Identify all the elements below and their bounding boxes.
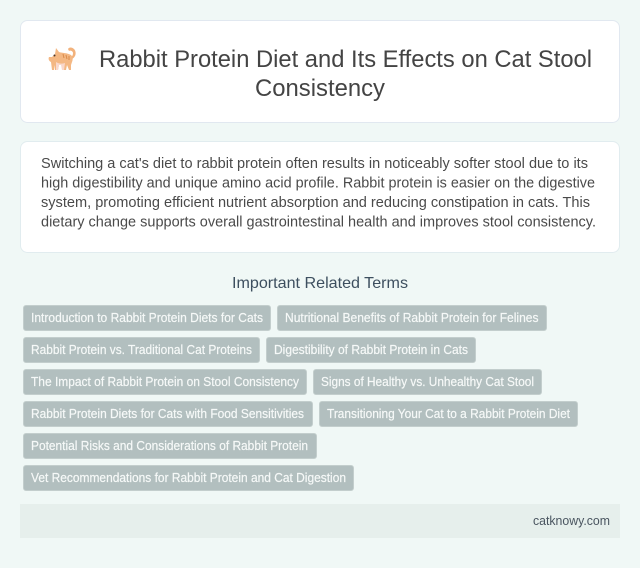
tag: impact: The Impact of Rabbit Protein on Stool Consistency	[31, 374, 300, 389]
footer	[20, 504, 620, 538]
tag: impact	[24, 370, 306, 394]
description line 1: Switching a cat's diet to rabbit protein often results in noticeably softer stool due to its	[41, 155, 588, 172]
panel: description	[20, 142, 620, 252]
title line 1: Rabbit Protein Diet and Its Effects on Cat Stool	[99, 46, 592, 73]
tag: traditional proteins	[24, 338, 260, 362]
description line 3: system, promoting efficient nutrient absorption and reducing constipation in cats. This	[41, 194, 590, 211]
tag: signs: Signs of Healthy vs. Unhealthy Cat Stool	[321, 374, 534, 389]
tag: food sensitivities	[24, 402, 312, 426]
tag: vet recommendations: Vet Recommendations for Rabbit Protein and Cat Digestion	[31, 470, 346, 485]
tag: nutritional benefits	[278, 306, 546, 330]
tag: transitioning: Transitioning Your Cat to a Rabbit Protein Diet	[327, 406, 570, 421]
tag: introduction	[24, 306, 270, 330]
tag: food sensitivities: Rabbit Protein Diets for Cats with Food Sensitivities	[31, 406, 304, 421]
tag: traditional proteins: Rabbit Protein vs. Traditional Cat Proteins	[31, 342, 252, 357]
tag: introduction: Introduction to Rabbit Protein Diets for Cats	[31, 310, 263, 325]
description line 2: high digestibility and unique amino acid profile. Rabbit protein is easier on the digestive	[41, 174, 595, 192]
tag: nutritional benefits: Nutritional Benefits of Rabbit Protein for Felines	[285, 310, 538, 325]
description line 4: dietary change supports overall gastrointestinal health and improves stool consistency.	[41, 214, 596, 230]
heading: important related terms: Important Related Terms	[232, 275, 408, 292]
tag: vet recommendations	[24, 466, 354, 490]
tag: risks: Potential Risks and Considerations of Rabbit Protein	[31, 438, 308, 453]
tag: transitioning	[320, 402, 578, 426]
icon: cat	[49, 48, 76, 70]
tag: digestibility	[266, 338, 476, 362]
tag: risks	[24, 434, 316, 458]
title line 2: Consistency	[255, 75, 385, 102]
tag: signs	[314, 370, 542, 394]
tag: digestibility: Digestibility of Rabbit Protein in Cats	[274, 342, 468, 357]
panel: title header	[20, 20, 620, 122]
footer source: catknowy.com	[533, 514, 610, 528]
tag list	[24, 306, 578, 490]
